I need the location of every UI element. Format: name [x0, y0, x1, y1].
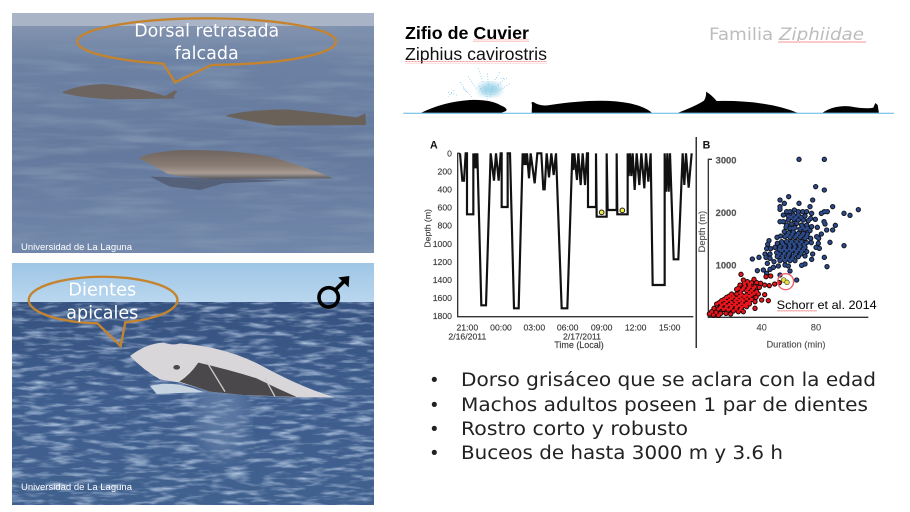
photo credit: Universidad de La Laguna: [21, 482, 132, 492]
whale: breaching male: [130, 343, 335, 397]
whale reflection: [150, 177, 290, 190]
bullet: rostrum: Rostro corto y robusto: [461, 419, 688, 440]
sea background: [12, 13, 374, 253]
y tick labels: [716, 155, 736, 270]
x tick labels: 00:00: [490, 323, 512, 333]
y tick labels: 800: [438, 221, 452, 231]
illustration: beaked whale silhouettes at waterline: [403, 68, 894, 114]
y tick labels: 1000: [433, 239, 452, 249]
panel letter: B: [703, 140, 711, 152]
axes: [708, 159, 868, 317]
x tick labels: [448, 323, 681, 341]
title: scientific name: Ziphius cavirostris: [405, 44, 547, 64]
x axis title: Time (Local): [554, 340, 604, 350]
yellow markers: [599, 208, 625, 215]
panel: photo of three whales at the surface: [12, 13, 374, 253]
silhouette: first whale: [420, 100, 507, 113]
sky band: [12, 13, 374, 26]
blow spray: [447, 68, 510, 99]
silhouette: fourth whale: [822, 103, 879, 113]
silhouette: second whale: [532, 101, 652, 113]
bullet: diving: •: [431, 443, 438, 464]
y tick labels: 0: [447, 148, 452, 158]
bullet: colour: Dorso grisáceo que se aclara con la edad: [461, 370, 876, 391]
silhouette: third whale: [677, 92, 799, 113]
sea: [12, 302, 374, 505]
y axis title: Depth (m): [697, 211, 707, 252]
bullet: colour: •: [431, 370, 438, 391]
sky: [12, 263, 374, 302]
y tick labels: 1800: [433, 311, 452, 321]
title: common name: Zifio de Cuvier: [405, 23, 529, 43]
chart B: depth versus duration scatter: [697, 140, 868, 349]
y tick labels: 3000: [716, 155, 736, 165]
y tick labels: 600: [438, 203, 452, 213]
x tick labels: 12:00: [625, 323, 647, 333]
dive profile line: [460, 153, 692, 308]
y tick labels: 2000: [716, 208, 736, 218]
bubble text: falcada: falcada: [175, 44, 239, 64]
bullet: rostrum: •: [431, 419, 438, 440]
whale: far left: [62, 84, 178, 99]
light reflection on water: [196, 360, 248, 460]
citation: Schorr et al. 2014: [777, 298, 877, 312]
x tick labels: 06:00: [557, 323, 579, 333]
whales: [62, 84, 366, 190]
x tick labels: 09:00: [591, 323, 613, 333]
blue points: deep dives: [752, 159, 858, 280]
y tick labels: [433, 148, 452, 321]
red points: shallow dives: [709, 274, 779, 315]
photo credit: Universidad de La Laguna: [21, 242, 132, 252]
icon: male symbol: [319, 276, 349, 307]
y tick labels: 1200: [433, 257, 452, 267]
speech bubble: dorsal: [77, 18, 336, 82]
bubble text: dorsal: Dorsal retrasada: [134, 22, 279, 42]
x tick labels: 2/17/2011: [563, 331, 601, 341]
y axis title: Depth (m): [423, 209, 433, 248]
water ripples: [12, 26, 374, 253]
highlighted yellow points: [778, 274, 794, 290]
divider between charts: [696, 137, 697, 348]
x tick labels: 80: [811, 323, 821, 333]
bullet: teeth: Machos adultos poseen 1 par de dientes: [461, 395, 868, 416]
x tick labels: 21:00: [456, 323, 478, 333]
axes: [458, 153, 693, 317]
speech bubble: teeth: [29, 277, 177, 346]
bubble text: dientes: Dientes: [68, 281, 136, 301]
whale: foreground: [138, 150, 333, 179]
y tick labels: 1400: [433, 275, 452, 285]
whale: far right: [225, 109, 366, 126]
chart A: dive depth over time: [423, 140, 693, 350]
x tick labels: [756, 323, 821, 333]
bullet: diving: Buceos de hasta 3000 m y 3.6 h: [461, 443, 783, 464]
bubble text: apicales: apicales: [66, 303, 138, 323]
x tick labels: 03:00: [523, 323, 545, 333]
bullet: teeth: •: [431, 395, 438, 416]
x tick labels: 40: [756, 323, 767, 333]
x tick labels: 15:00: [659, 323, 681, 333]
y tick labels: 1600: [433, 293, 452, 303]
bullet list: key traits: [431, 370, 876, 464]
waterline: [403, 113, 894, 114]
water ripples: [12, 302, 374, 505]
y tick labels: 400: [438, 184, 452, 194]
y tick labels: 1000: [716, 260, 736, 270]
panel: photo of adult male whale: [12, 263, 374, 505]
y tick labels: 200: [438, 166, 452, 176]
x axis title: Duration (min): [766, 339, 826, 349]
panel letter: A: [430, 140, 438, 152]
family label: Familia Ziphiidae: [709, 25, 864, 45]
x tick labels: 2/16/2011: [448, 331, 486, 341]
